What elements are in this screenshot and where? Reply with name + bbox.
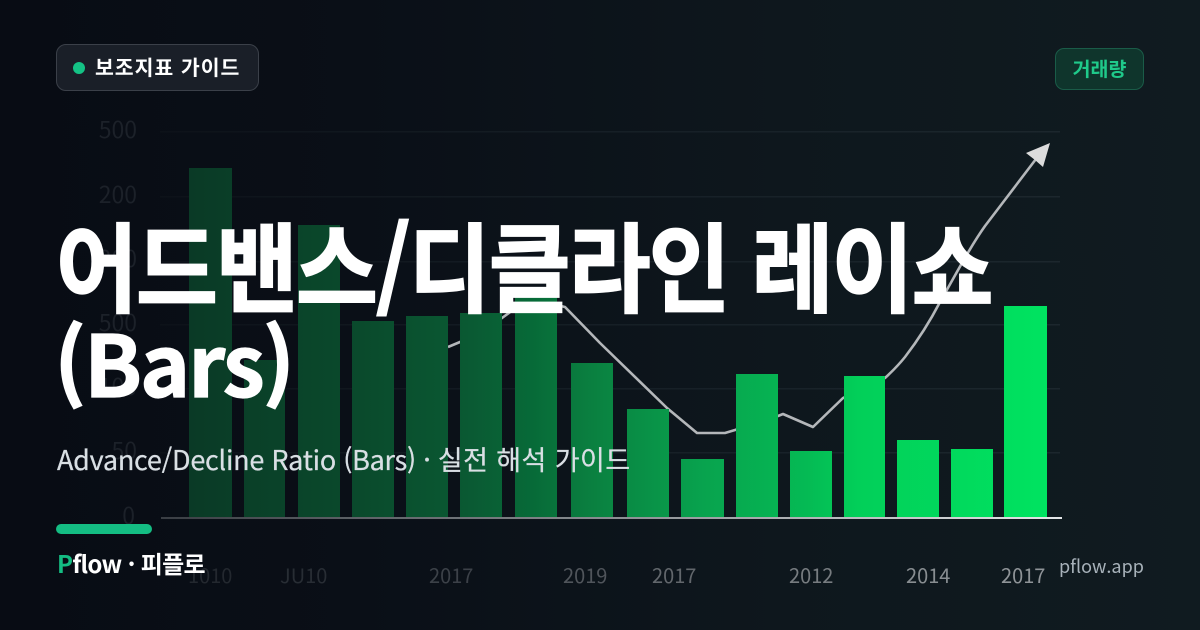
y axis labels: 200 — [99, 176, 137, 210]
x axis labels: 2017 — [1001, 560, 1045, 589]
title: (Bars) — [54, 299, 293, 422]
tag: volume: 거래량 — [1073, 53, 1126, 82]
x axis labels: JU10 — [280, 560, 327, 589]
y axis labels: 100 — [99, 368, 137, 402]
y axis labels: 500 — [99, 304, 137, 338]
badge: indicator guide: 보조지표 가이드 — [95, 51, 240, 81]
title — [54, 192, 992, 422]
x axis line — [161, 517, 1062, 519]
badge: indicator guide — [56, 44, 259, 91]
x axis labels: 2017 — [429, 560, 473, 589]
tag: volume — [1055, 48, 1144, 90]
y axis labels: 200 — [99, 240, 137, 274]
accent bar — [56, 524, 152, 534]
bars — [189, 168, 1047, 518]
x axis labels: 2014 — [906, 560, 950, 589]
x axis labels — [188, 560, 1045, 589]
trend line — [448, 143, 1050, 433]
y axis labels: 0 — [122, 497, 135, 531]
site url: pflow.app — [1059, 553, 1144, 579]
y axis labels: 500 — [99, 111, 137, 145]
x axis labels: 2012 — [789, 560, 833, 589]
y axis labels — [99, 111, 137, 531]
x axis labels: 2019 — [563, 560, 607, 589]
brand: Pflow · 피플로 — [57, 545, 205, 580]
x axis labels: 1010 — [188, 560, 232, 589]
title: 어드밴스/디클라인 레이쇼 — [56, 192, 992, 333]
subtitle: Advance/Decline Ratio (Bars) · 실전 해석 가이드 — [57, 439, 630, 478]
x axis labels: 2017 — [652, 560, 696, 589]
y axis labels: 50 — [111, 432, 137, 466]
